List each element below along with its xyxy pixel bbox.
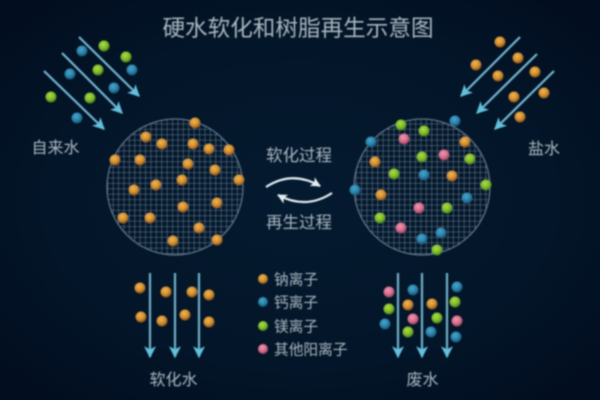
sodium ions on resin (110, 118, 244, 246)
legend: magnesium: 镁离子 (274, 318, 318, 336)
label: softened water: 软化水 (149, 371, 198, 389)
legend (258, 272, 347, 358)
softened water ions (134, 282, 214, 328)
waste water outflow (380, 273, 462, 357)
cycle arrows (266, 178, 332, 202)
legend: sodium: 钠离子 (274, 272, 318, 288)
brine inflow group (461, 36, 554, 129)
arrows: tap water (44, 37, 139, 129)
waste water ions (380, 282, 462, 342)
tap water inflow group (44, 37, 139, 129)
mixed ions on resin (350, 116, 492, 256)
arrows: softened water (150, 273, 199, 357)
softened water outflow (134, 273, 214, 357)
label: brine: 盐水 (528, 140, 560, 158)
label: tap water: 自来水 (31, 139, 80, 157)
mesh disc right (354, 119, 490, 255)
label: softening process: 软化过程 (266, 146, 332, 165)
legend: calcium: 钙离子 (274, 294, 318, 312)
label: regeneration process: 再生过程 (266, 213, 332, 232)
tap water ions (46, 40, 138, 124)
legend: other cations: 其他阳离子 (274, 342, 347, 358)
arrows: waste water (398, 273, 447, 357)
arrows: brine (461, 37, 554, 129)
title: 硬水软化和树脂再生示意图 (162, 16, 434, 41)
mesh disc left (107, 119, 243, 255)
resin bead: regeneration (350, 116, 492, 256)
resin bead: softening (107, 118, 244, 255)
brine ions (470, 36, 550, 122)
label: waste water: 废水 (406, 371, 439, 389)
